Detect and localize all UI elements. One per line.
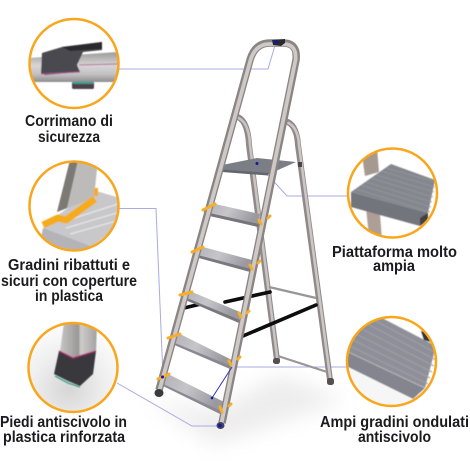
front feet (154, 389, 164, 397)
back feet (273, 358, 280, 364)
label: corrugated steps (320, 414, 469, 446)
panel: handrail detail (28, 19, 118, 108)
ladder (154, 39, 334, 429)
yellow clips (158, 204, 270, 412)
label: steps with plastic covers (1, 257, 137, 305)
label: wide platform: Piattaforma molto (332, 244, 457, 261)
platform (222, 158, 296, 176)
label: wide platform (332, 244, 457, 275)
panel: corrugated steps detail (340, 317, 438, 412)
label: steps with plastic covers: in plastica (35, 288, 103, 305)
connector lines (117, 42, 348, 426)
label: handrail: sicurezza (38, 129, 100, 146)
label: steps with plastic covers: sicuri con coperture (1, 273, 137, 290)
grey braces (269, 287, 327, 372)
label: wide platform: ampia (373, 258, 415, 275)
back legs (238, 117, 330, 380)
handrail grip (272, 39, 285, 46)
label: anti-slip feet: Piedi antiscivolo in (0, 414, 127, 431)
panel: wide platform detail (348, 148, 437, 240)
target dots (161, 40, 278, 427)
floor shadow (150, 375, 345, 445)
steps (158, 204, 260, 414)
black straps (184, 292, 316, 336)
label: corrugated steps: antiscivolo (358, 429, 431, 446)
front frame (159, 43, 296, 423)
panel: anti-slip feet detail (28, 322, 118, 412)
label: anti-slip feet (0, 414, 127, 446)
label: handrail: Corrimano di (25, 113, 113, 130)
label: steps with plastic covers: Gradini ribattuti e (8, 257, 130, 274)
label: handrail (25, 113, 113, 146)
panel: steps with plastic covers detail (30, 160, 120, 254)
label: anti-slip feet: plastica rinforzata (3, 429, 125, 446)
